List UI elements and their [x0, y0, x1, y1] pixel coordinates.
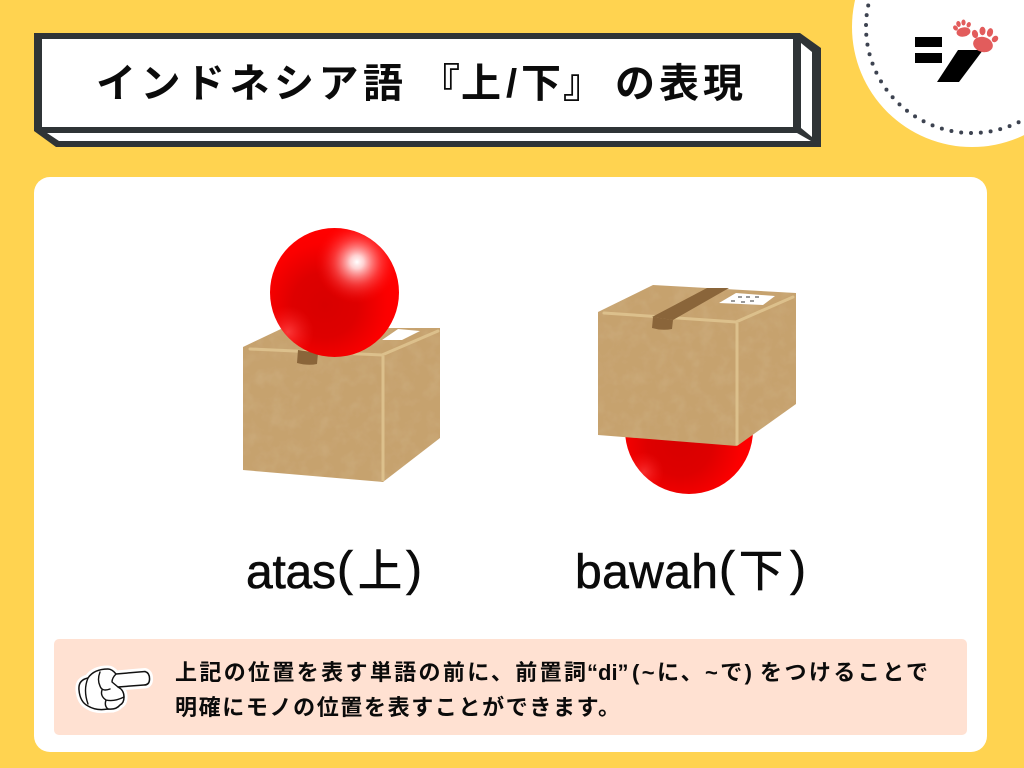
note text: をつけることで — [760, 660, 928, 685]
note text: “di” — [587, 660, 629, 685]
note text: 上記の位置を表す単語の前に、前置詞 — [175, 660, 586, 685]
title text — [96, 62, 743, 106]
label: atas: ) — [406, 543, 422, 596]
box — [243, 328, 440, 482]
label: bawah: ( — [719, 543, 735, 596]
label: atas: ( — [337, 543, 353, 596]
title text: 『上/下』 — [420, 62, 603, 106]
logo badge — [852, 0, 1024, 147]
icon: pointing hand — [79, 669, 150, 710]
label: bawah: bawah — [575, 546, 718, 599]
note text: 明確にモノの位置を表すことができます。 — [175, 695, 620, 720]
box — [598, 285, 796, 446]
label: atas: atas — [246, 546, 336, 599]
label: bawah: ) — [790, 543, 806, 596]
label: atas: 上 — [358, 547, 402, 596]
label: bawah — [575, 543, 806, 599]
illustration: ball on top of box — [243, 228, 440, 482]
label: bawah: 下 — [739, 547, 783, 596]
label: atas — [246, 543, 422, 599]
illustration: ball under box — [598, 285, 796, 494]
title text: の表現 — [615, 62, 743, 106]
red ball — [270, 228, 399, 357]
note panel — [54, 639, 967, 735]
title text: インドネシア語 — [96, 62, 403, 106]
red ball — [625, 366, 753, 494]
main white panel — [34, 177, 987, 752]
note text — [175, 660, 928, 720]
note text: (~に、~で) — [632, 660, 752, 685]
title banner — [34, 33, 821, 147]
